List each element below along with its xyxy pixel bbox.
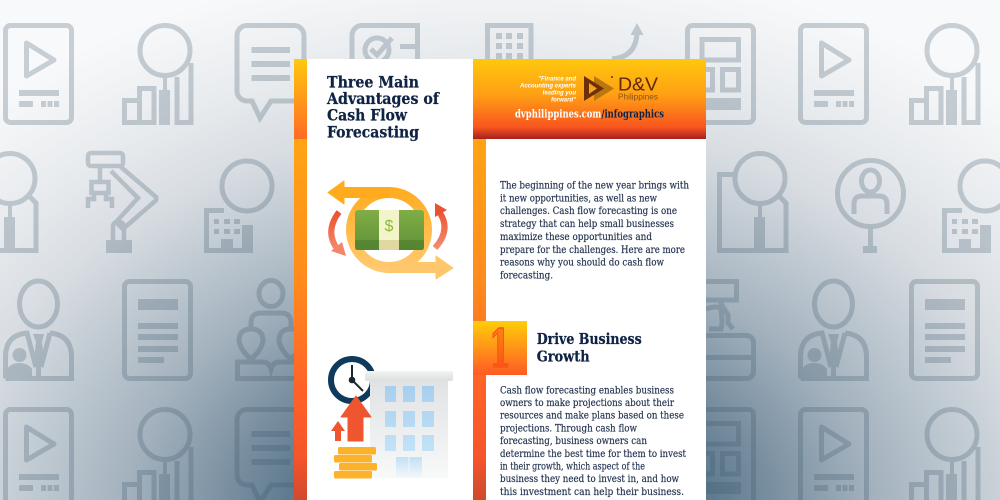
- tagline: "Finance and: [538, 76, 576, 82]
- centre strip: [473, 139, 486, 500]
- icon: layout document: [688, 26, 754, 122]
- body paragraph: business they need to invest in, and how: [500, 473, 679, 485]
- body paragraph: projections. Through cash flow: [500, 422, 637, 434]
- intro paragraph: strategy that can help small businesses: [500, 218, 674, 230]
- left strip: [294, 139, 307, 500]
- intro paragraph: [500, 180, 689, 282]
- header banner: [473, 59, 706, 139]
- illustration: business growth: [331, 359, 453, 478]
- icon: magnifier over building: [944, 161, 1000, 253]
- intro paragraph: The beginning of the new year brings with: [500, 180, 689, 192]
- icon: group of people: [238, 280, 304, 378]
- icon: layout document: [688, 410, 754, 500]
- body paragraph: Cash flow forecasting enables business: [500, 384, 674, 396]
- ring with arrows: [328, 181, 453, 279]
- logo wordmark: [618, 75, 658, 102]
- icon: office building: [488, 26, 531, 63]
- icon: magnifier over building: [206, 161, 272, 253]
- icon: business person: [800, 281, 866, 381]
- body paragraph: determine the best time for them to invest: [500, 448, 687, 460]
- website url: dvphilippines.com/infographics: [515, 108, 664, 121]
- title: [326, 72, 440, 142]
- tagline: Accounting experts: [519, 84, 577, 90]
- body paragraph: [500, 384, 687, 498]
- coin stack: [334, 447, 377, 478]
- icon: play document: [800, 26, 866, 122]
- icon: magnifier over document: [720, 154, 786, 253]
- illustration: cash flow cycle: [328, 181, 453, 279]
- icon: play document: [800, 410, 866, 500]
- icon: business person: [6, 281, 72, 381]
- tagline: forward": [551, 98, 576, 104]
- clock: [331, 359, 373, 401]
- icon: document: [912, 282, 978, 378]
- panel: white page background: [294, 59, 706, 500]
- body paragraph: forecasting, business owners can: [500, 435, 647, 447]
- number badge 1: 1: [489, 319, 511, 380]
- logo wordmark: Philippines: [618, 92, 658, 102]
- body paragraph: this investment can help their business.: [500, 486, 684, 498]
- left strip top: [294, 59, 307, 139]
- intro paragraph: challenges. Cash flow forecasting is one: [500, 205, 677, 217]
- body paragraph: owners to make projections about their: [500, 397, 675, 409]
- title: Three Main: [327, 72, 419, 91]
- icon: magnifier over chart: [124, 26, 191, 125]
- icon: magnifier over chart: [912, 410, 978, 500]
- red cycle arrow left: [331, 212, 346, 256]
- icon: person in magnifier: [838, 160, 904, 253]
- body paragraph: in their growth, which aspect of the: [500, 460, 645, 472]
- icon: magnifier over document: [0, 154, 36, 253]
- icon: growth arrow: [612, 23, 644, 59]
- icon: play document: [6, 26, 72, 122]
- large growth arrow: [341, 396, 371, 441]
- logo wordmark: D&V: [618, 75, 658, 95]
- body paragraph: resources and make plans based on these: [500, 410, 684, 422]
- red cycle arrow right: [435, 203, 447, 248]
- intro paragraph: maximize these opportunities and: [500, 231, 652, 243]
- tagline: [519, 76, 577, 104]
- icon: speech bubble: [237, 410, 304, 500]
- icon: robot arm: [88, 153, 156, 253]
- intro paragraph: forecasting.: [500, 270, 553, 282]
- title: Advantages of: [326, 89, 440, 108]
- heading: drive business growth: [537, 330, 642, 366]
- icon: checklist document: [352, 23, 420, 83]
- heading: drive business growth: Growth: [537, 348, 590, 366]
- icon: magnifier over chart: [912, 26, 978, 125]
- tagline: leading you: [543, 90, 576, 96]
- title: Cash Flow: [327, 106, 408, 125]
- intro paragraph: it new opportunities, as well as new: [500, 192, 657, 204]
- number badge 1: [473, 319, 527, 380]
- panel: infographic page: [294, 59, 706, 500]
- banknote: $: [385, 218, 394, 235]
- intro paragraph: reasons why you should do cash flow: [500, 257, 664, 269]
- intro paragraph: prepare for the challenges. Here are more: [500, 244, 685, 256]
- icon: magnifier over chart: [124, 410, 191, 500]
- icon: speech bubble: [237, 26, 304, 118]
- heading: drive business growth: Drive Business: [537, 330, 642, 348]
- small growth arrow: [331, 421, 345, 441]
- icon: document: [124, 282, 190, 378]
- title: Forecasting: [327, 122, 419, 142]
- office building: [365, 371, 453, 478]
- icon: hand and books: [665, 282, 754, 378]
- logo mark: [584, 76, 614, 101]
- icon: play document: [6, 410, 72, 500]
